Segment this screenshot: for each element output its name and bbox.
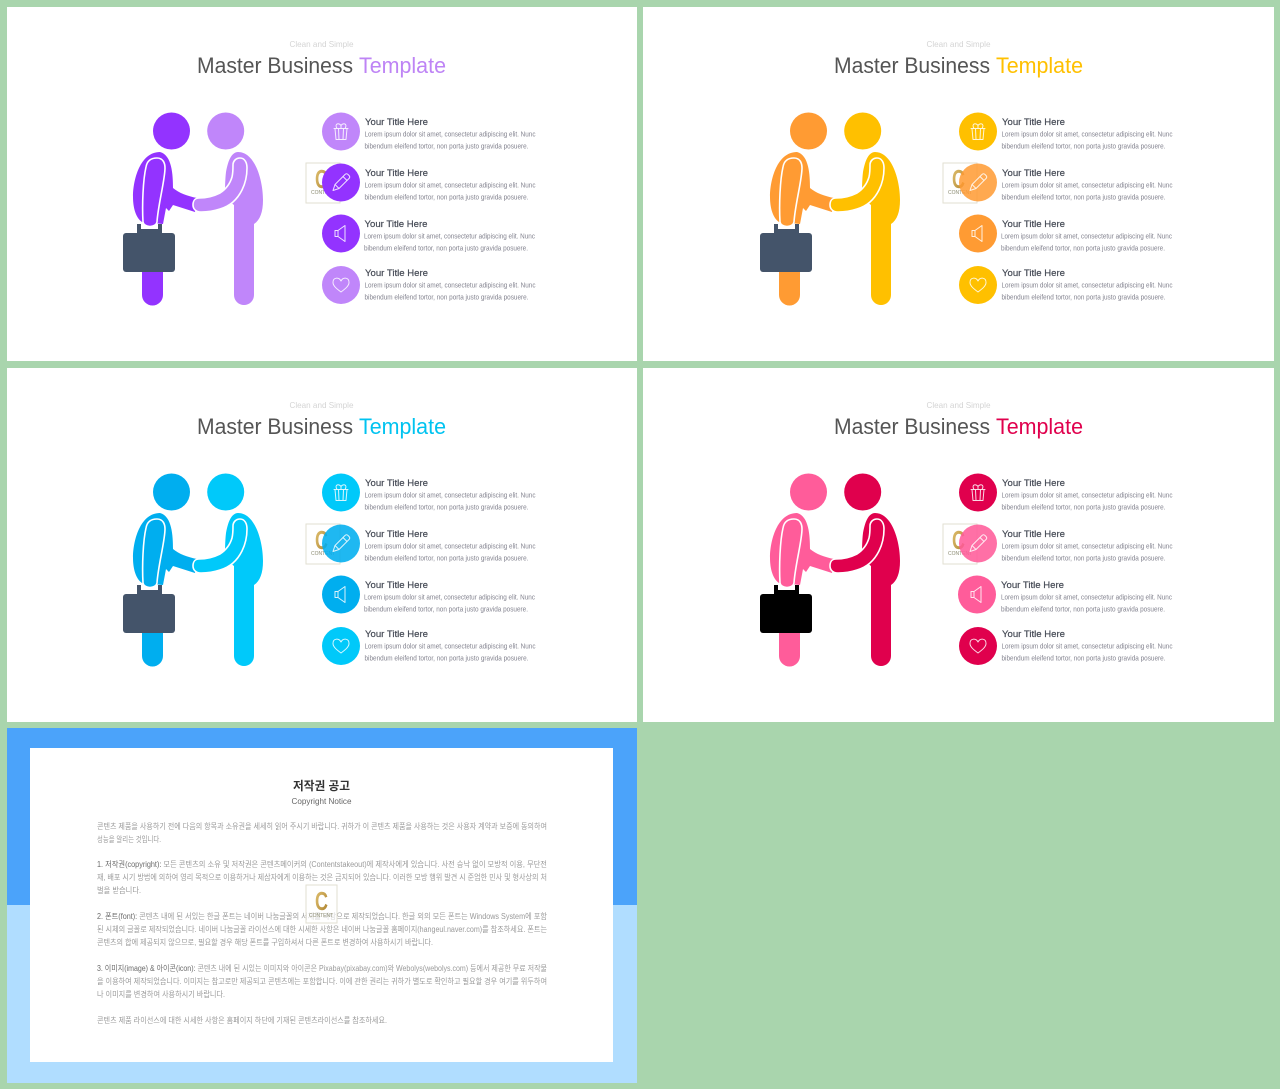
- item 1: [322, 112, 536, 150]
- item 2: [959, 164, 1173, 202]
- item 1: [959, 112, 1173, 150]
- paragraph: image and icon: [97, 963, 547, 999]
- item 2: Your Title Here: [365, 168, 428, 179]
- panel: purple slide: [7, 7, 637, 361]
- item 3: Lorem ipsum dolor sit amet, consectetur adipiscing elit. Nunc: [364, 234, 535, 240]
- item 3: bibendum eleifend tortor, non porta justo gravida posuere.: [1001, 606, 1165, 614]
- item 3: Your Title Here: [365, 580, 428, 591]
- item 4: [322, 266, 536, 304]
- item 4: Your Title Here: [365, 268, 428, 279]
- paragraph: copyright: 재, 배포 시기 방법에 의하여 영리 목적으로 이용하거나 제삼자에게 이용하는 것은 금지되어 있습니다. 이러한 모방 행위 발견 시 준엄한 민사 및 형사상의 처: [97, 872, 547, 882]
- item 2: Lorem ipsum dolor sit amet, consectetur adipiscing elit. Nunc: [1002, 544, 1173, 550]
- logo watermark: CONTENT: [311, 190, 335, 196]
- paragraph: image and icon: 3. 이미지(image) & 아이콘(icon): 콘텐츠 내에 된 시있는 이미지와 아이콘은 Pixabay(pixabay.com)와 Webolys(webolys.com) 등에서 제공한 무료 저작물: [97, 963, 547, 973]
- illustration: handshake figures with briefcase: [123, 474, 263, 666]
- item 1: bibendum eleifend tortor, non porta justo gravida posuere.: [1002, 144, 1166, 150]
- title: Master Business: [834, 53, 990, 78]
- item 2: Your Title Here: [1002, 168, 1065, 179]
- item 3: Lorem ipsum dolor sit amet, consectetur adipiscing elit. Nunc: [1001, 234, 1172, 240]
- item 3: Your Title Here: [364, 219, 428, 230]
- title: Template: [996, 53, 1083, 78]
- item 3: [958, 576, 1172, 614]
- intro paragraph: 콘텐츠 제품을 사용하기 전에 다음의 항목과 소유권을 세세히 읽어 주시기 바랍니다. 귀하가 이 콘텐츠 제품을 사용하는 것은 사용자 계약과 보증에 동의하여: [97, 821, 547, 831]
- item 4: Lorem ipsum dolor sit amet, consectetur adipiscing elit. Nunc: [364, 282, 536, 290]
- paragraph: copyright: 1. 저작권(copyright): 모든 콘텐츠의 소유 및 저작권은 콘텐츠메이커의 (Contentstakeout)에 제작사에게 있습니다. 사전 승낙 없이 모방적 이용, 무단전: [97, 859, 547, 869]
- paragraph: font: 된 시체의 글꼴로 제작되었습니다. 네이버 나눔글꼴 라이선스에 대한 시세한 사항은 네이버 나눔글꼴 홈페이지(hangeul.naver.com)를 참조하세요. 폰트는: [97, 924, 547, 934]
- logo watermark: [943, 524, 977, 564]
- panel: pink slide: [643, 368, 1274, 722]
- panel: blue slide: [7, 368, 637, 722]
- paragraph: image and icon: 을 이용하여 제작되었습니다. 이미지는 참고로만 제공되고 콘텐츠에는 포함합니다. 이에 관한 권리는 귀하가 별도로 확인하고 필요할 경우 여기를 위두하여: [97, 976, 547, 986]
- item 2: bibendum eleifend tortor, non porta justo gravida posuere.: [364, 194, 529, 202]
- paragraph: license: 콘텐츠 제품 라이선스에 대한 시세한 사항은 홈페이지 하단에 기재된 콘텐츠라이선스를 참조하세요.: [97, 1015, 387, 1025]
- item 1: Lorem ipsum dolor sit amet, consectetur adipiscing elit. Nunc: [1002, 132, 1173, 138]
- item 2: bibendum eleifend tortor, non porta justo gravida posuere.: [1002, 194, 1166, 202]
- item 3: Lorem ipsum dolor sit amet, consectetur adipiscing elit. Nunc: [364, 594, 535, 602]
- item 4: Your Title Here: [1002, 268, 1065, 279]
- item 1: bibendum eleifend tortor, non porta justo gravida posuere.: [364, 504, 529, 512]
- intro paragraph: [97, 821, 547, 844]
- logo watermark: C: [315, 886, 328, 916]
- item 3: [322, 576, 535, 614]
- subtitle: Clean and Simple: [926, 39, 991, 49]
- title: Template: [359, 414, 446, 439]
- item 4: bibendum eleifend tortor, non porta justo gravida posuere.: [1002, 294, 1166, 302]
- logo watermark: [306, 524, 340, 564]
- item 3: bibendum eleifend tortor, non porta justo gravida posuere.: [1001, 246, 1165, 252]
- illustration: handshake figures with briefcase: [760, 112, 900, 306]
- item 1: Lorem ipsum dolor sit amet, consectetur adipiscing elit. Nunc: [1002, 492, 1173, 500]
- item 1: Your Title Here: [1002, 117, 1065, 128]
- logo watermark: C: [315, 164, 328, 194]
- item 3: [959, 214, 1172, 252]
- logo watermark: C: [952, 525, 965, 555]
- title: Master Business: [197, 53, 353, 78]
- notice heading: 저작권 공고: [293, 778, 350, 793]
- logo watermark: C: [952, 164, 965, 194]
- illustration: handshake figures with briefcase: [123, 112, 263, 306]
- paragraph: copyright: 벌을 받습니다.: [97, 885, 141, 895]
- item 3: Your Title Here: [1002, 219, 1065, 230]
- notice subheading: Copyright Notice: [292, 796, 352, 806]
- logo watermark: CONTENT: [948, 190, 972, 196]
- logo watermark: C: [315, 525, 328, 555]
- subtitle: Clean and Simple: [926, 400, 991, 410]
- item 1: Lorem ipsum dolor sit amet, consectetur adipiscing elit. Nunc: [364, 132, 536, 138]
- title: [834, 53, 1083, 78]
- logo watermark: [306, 885, 337, 923]
- title: [197, 414, 446, 439]
- item 2: [959, 524, 1173, 562]
- item 3: [322, 214, 535, 252]
- item 2: Your Title Here: [365, 529, 428, 540]
- item 4: Your Title Here: [365, 629, 428, 640]
- title: Template: [359, 53, 446, 78]
- item 4: [959, 627, 1173, 665]
- item 2: [322, 524, 536, 562]
- item 1: Your Title Here: [365, 478, 428, 489]
- item 1: Your Title Here: [365, 117, 428, 128]
- item 4: Lorem ipsum dolor sit amet, consectetur adipiscing elit. Nunc: [1002, 644, 1173, 650]
- item 1: [959, 474, 1173, 512]
- logo watermark: [306, 163, 340, 203]
- paragraph: font: 2. 폰트(font): 콘텐츠 내에 된 서있는 한글 폰트는 네이버 나눔글꼴의 서체를 바탕으로 제작되었습니다. 한글 외의 모든 폰트는 Windows System에 포함: [97, 911, 548, 921]
- item 2: Lorem ipsum dolor sit amet, consectetur adipiscing elit. Nunc: [364, 544, 536, 550]
- item 3: bibendum eleifend tortor, non porta justo gravida posuere.: [364, 246, 528, 252]
- item 4: bibendum eleifend tortor, non porta justo gravida posuere.: [1002, 656, 1166, 662]
- item 4: Lorem ipsum dolor sit amet, consectetur adipiscing elit. Nunc: [364, 644, 536, 650]
- paragraph: font: 콘텐츠의 합에 제공되지 않으므로, 필요할 경우 해당 폰트를 구입하셔서 다른 폰트로 변경하여 사용하시기 바랍니다.: [97, 937, 433, 947]
- item 4: Lorem ipsum dolor sit amet, consectetur adipiscing elit. Nunc: [1002, 282, 1173, 290]
- item 2: Lorem ipsum dolor sit amet, consectetur adipiscing elit. Nunc: [364, 182, 536, 190]
- item 4: bibendum eleifend tortor, non porta justo gravida posuere.: [364, 656, 529, 662]
- logo watermark: CONTENT: [948, 551, 972, 557]
- item 1: Lorem ipsum dolor sit amet, consectetur adipiscing elit. Nunc: [364, 492, 536, 500]
- item 2: Lorem ipsum dolor sit amet, consectetur adipiscing elit. Nunc: [1002, 182, 1173, 190]
- paragraph: image and icon: 나 이미지를 변경하여 사용하시기 바랍니다.: [97, 989, 225, 999]
- subtitle: Clean and Simple: [290, 39, 354, 49]
- item 2: bibendum eleifend tortor, non porta justo gravida posuere.: [1002, 556, 1166, 562]
- logo watermark: CONTENT: [311, 551, 335, 557]
- item 1: bibendum eleifend tortor, non porta justo gravida posuere.: [1002, 504, 1166, 512]
- panel: copyright notice: [7, 728, 637, 1083]
- item 2: [322, 164, 536, 202]
- title: Master Business: [834, 414, 990, 439]
- illustration: handshake figures with briefcase: [760, 474, 900, 666]
- item 3: Your Title Here: [1001, 580, 1064, 591]
- item 4: [959, 266, 1173, 304]
- item 4: bibendum eleifend tortor, non porta justo gravida posuere.: [364, 294, 529, 302]
- item 4: Your Title Here: [1002, 629, 1065, 640]
- title: Template: [996, 414, 1083, 439]
- item 4: [322, 627, 536, 665]
- logo watermark: CONTENT: [309, 913, 333, 919]
- title: Master Business: [197, 414, 353, 439]
- item 2: bibendum eleifend tortor, non porta justo gravida posuere.: [364, 556, 529, 562]
- item 2: Your Title Here: [1002, 529, 1065, 540]
- paragraph: font: [97, 911, 548, 947]
- subtitle: Clean and Simple: [290, 400, 354, 410]
- item 1: Your Title Here: [1002, 478, 1065, 489]
- title: [834, 414, 1083, 439]
- item 1: [322, 474, 536, 512]
- paragraph: copyright: [97, 859, 547, 895]
- title: [197, 53, 446, 78]
- item 3: bibendum eleifend tortor, non porta justo gravida posuere.: [364, 606, 528, 614]
- item 3: Lorem ipsum dolor sit amet, consectetur adipiscing elit. Nunc: [1001, 594, 1172, 602]
- item 1: bibendum eleifend tortor, non porta justo gravida posuere.: [364, 144, 529, 150]
- logo watermark: [943, 163, 977, 203]
- panel: orange slide: [643, 7, 1274, 361]
- intro paragraph: 성능을 알리는 것입니다.: [97, 834, 161, 844]
